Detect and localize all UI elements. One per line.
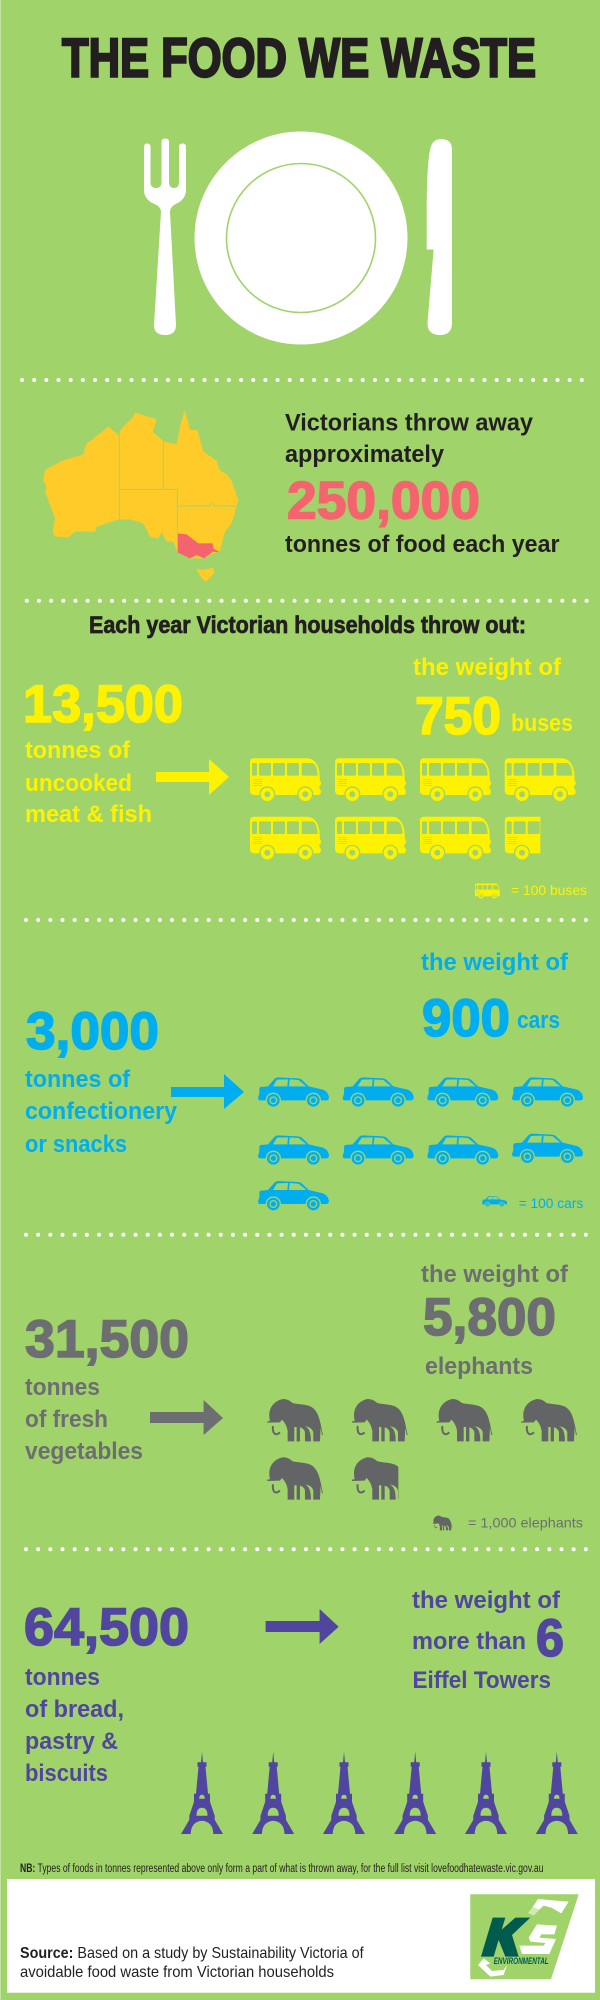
- icon: plate: [194, 132, 408, 344]
- text: the weight of 900 cars: cars: [517, 1007, 560, 1034]
- legend: 100 buses: [475, 882, 587, 899]
- text: the weight of more than 6 Eiffel Towers: more than: [412, 1628, 526, 1655]
- text: tonnes of confectionery or snacks: or snacks: [25, 1131, 127, 1158]
- text: tonnes of confectionery or snacks: confectionery: [25, 1098, 178, 1125]
- panel: fresh vegetables: [25, 1261, 583, 1531]
- text: the weight of 5,800 elephants: [421, 1261, 569, 1380]
- number: 64,500: 64,500: [24, 1598, 189, 1657]
- legend: 100 cars: = 100 cars: [519, 1195, 583, 1211]
- text: tonnes of bread, pastry and biscuits: tonnes: [25, 1664, 100, 1691]
- text: the weight of more than 6 Eiffel Towers: 6: [536, 1609, 564, 1668]
- text: approximately: approximately: [285, 441, 445, 468]
- arrow: [156, 759, 229, 795]
- text: the weight of 900 cars: 900: [422, 989, 510, 1048]
- panel: source and logo: [7, 1257, 595, 1993]
- panel: confectionery: [25, 949, 583, 1212]
- text: tonnes of confectionery or snacks: tonnes of: [25, 1066, 131, 1093]
- text: the weight of more than 6 Eiffel Towers: Eiffel Towers: [412, 1667, 551, 1694]
- text: the weight of 750 buses: [413, 654, 573, 746]
- panel: meat and fish: [23, 654, 587, 899]
- legend: 100 buses: = 100 buses: [511, 882, 587, 898]
- text: source line two: avoidable food waste from Victorian households: [20, 1964, 334, 1981]
- heading: each year: Each year Victorian households throw out:: [89, 612, 526, 639]
- number: 31,500: 31,500: [25, 1310, 189, 1369]
- text: tonnes of uncooked meat and fish: meat & fish: [25, 801, 152, 828]
- arrow: [266, 1609, 339, 1644]
- text: the weight of 900 cars: [421, 949, 569, 1048]
- icon: fork, plate and knife: [144, 132, 452, 344]
- icon: knife: [427, 139, 452, 335]
- text: tonnes of fresh vegetables: vegetables: [25, 1438, 143, 1465]
- text: tonnes of bread, pastry and biscuits: of bread,: [25, 1696, 124, 1723]
- map of Australia: [43, 410, 238, 582]
- text: the weight of 5,800 elephants: 5,800: [423, 1288, 556, 1347]
- number: 250,000: 250,000: [287, 472, 480, 530]
- text: tonnes of bread, pastry and biscuits: [25, 1664, 124, 1787]
- panel: Victoria total: [43, 410, 559, 582]
- text: source line one: Source: Based on a study by Sustainability Victoria of: [20, 1945, 364, 1962]
- text: tonnes of confectionery or snacks: [25, 1066, 178, 1158]
- icons: elephants: [267, 1399, 577, 1500]
- text: tonnes of bread, pastry and biscuits: biscuits: [25, 1760, 108, 1787]
- panel: bread, pastry and biscuits: [24, 1587, 578, 1834]
- text: tonnes of fresh vegetables: tonnes: [25, 1374, 100, 1401]
- text: the weight of 5,800 elephants: the weight of: [421, 1261, 569, 1288]
- legend: 1,000 elephants: = 1,000 elephants: [468, 1515, 583, 1531]
- arrow: [150, 1400, 223, 1435]
- text: the weight of more than 6 Eiffel Towers: the weight of: [412, 1587, 561, 1614]
- text: the weight of 750 buses: the weight of: [413, 654, 562, 681]
- text: tonnes of food each year: tonnes of food each year: [285, 531, 560, 558]
- icons: cars: [258, 1077, 583, 1212]
- number: 13,500: 13,500: [23, 675, 183, 734]
- text: the weight of 750 buses: buses: [511, 710, 573, 737]
- number: 3,000: 3,000: [26, 1002, 159, 1061]
- text: the weight of 5,800 elephants: elephants: [425, 1353, 533, 1380]
- icons: Eiffel Towers: [181, 1752, 578, 1834]
- text: the weight of more than 6 Eiffel Towers: [412, 1587, 564, 1694]
- text: the weight of 750 buses: 750: [415, 687, 501, 746]
- text: the weight of 900 cars: the weight of: [421, 949, 569, 976]
- logo: KS Environmental: ENVIRONMENTAL: [494, 1956, 549, 1966]
- text: tonnes of uncooked meat and fish: tonnes of: [25, 737, 131, 764]
- logo: KS Environmental: [308, 1257, 579, 1979]
- icon: fork: [144, 138, 186, 335]
- text: Victorians throw away: Victorians throw away: [285, 410, 534, 436]
- arrow: [171, 1074, 244, 1109]
- text: tonnes of fresh vegetables: [25, 1374, 143, 1465]
- text: tonnes of bread, pastry and biscuits: pastry &: [25, 1728, 118, 1755]
- legend: 100 cars: [482, 1195, 583, 1211]
- text: tonnes of uncooked meat and fish: uncooked: [25, 770, 132, 797]
- text: tonnes of uncooked meat and fish: [25, 737, 152, 828]
- text: tonnes of fresh vegetables: of fresh: [25, 1406, 108, 1433]
- icons: buses: [250, 758, 576, 861]
